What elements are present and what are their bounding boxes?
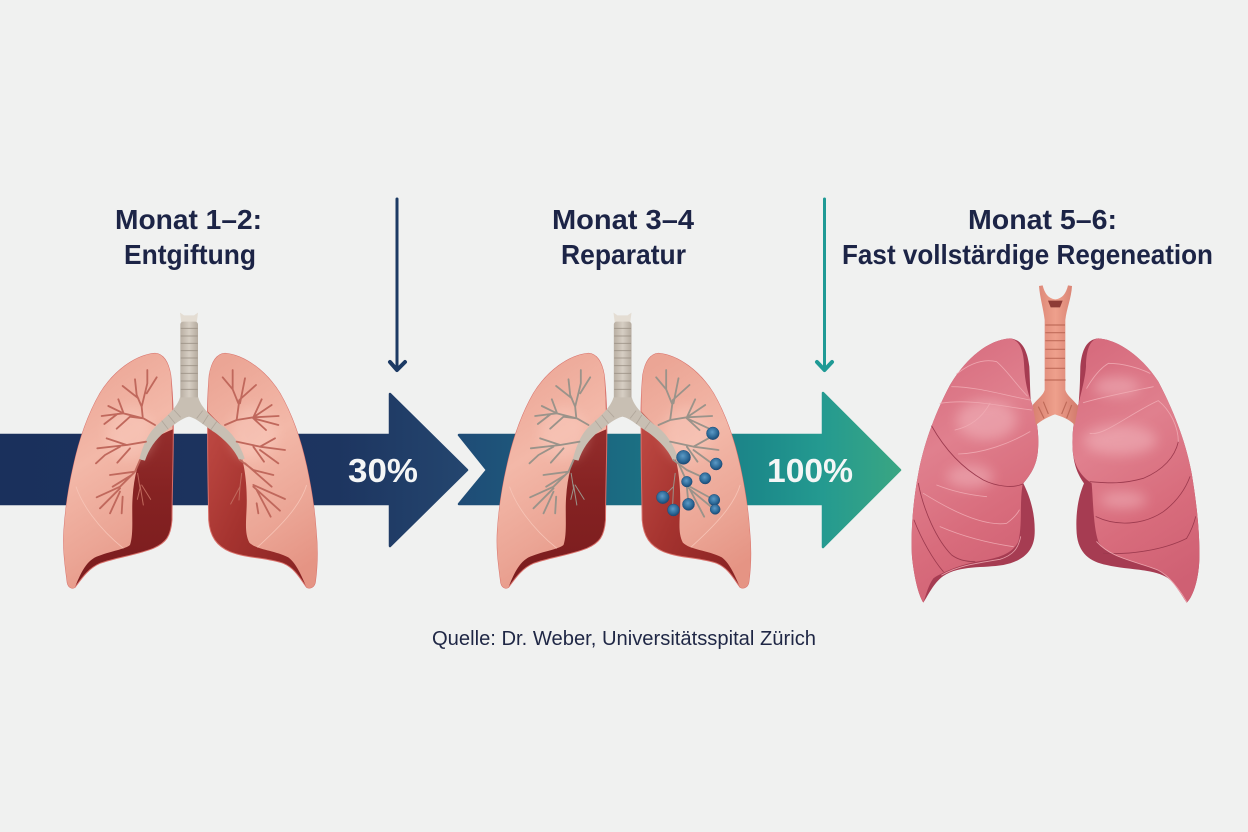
lung illustration: stage 1 bbox=[64, 313, 317, 588]
flow arrow: 100 percent stage bbox=[459, 393, 900, 547]
lung illustration: stage 2 with blue nodules bbox=[497, 313, 751, 588]
indicator arrow: navy bbox=[390, 199, 405, 370]
right lung front bbox=[1072, 338, 1199, 603]
heading: stage 3 bbox=[842, 204, 1213, 270]
heading: stage 3: Monat 5–6: bbox=[968, 204, 1117, 235]
heading: stage 1: Entgiftung bbox=[124, 239, 256, 270]
highlights bbox=[947, 377, 1157, 508]
left lung front bbox=[912, 338, 1038, 603]
trachea bbox=[1033, 285, 1078, 425]
heading: stage 1 bbox=[115, 204, 262, 270]
percentage label: 30%: 30% bbox=[348, 452, 418, 489]
heading: stage 2: Reparatur bbox=[561, 239, 686, 270]
blue nodules bbox=[656, 427, 722, 516]
lung illustration: stage 3 regenerated bbox=[912, 285, 1199, 603]
indicator arrow: teal bbox=[817, 199, 832, 370]
heading: stage 2: Monat 3–4 bbox=[552, 204, 694, 235]
left lung base bbox=[912, 338, 1038, 603]
source caption: Quelle: Dr. Weber, Universitätsspital Zürich bbox=[432, 628, 816, 650]
heading: stage 1: Monat 1–2: bbox=[115, 204, 262, 235]
percentage label: 100%: 100% bbox=[767, 452, 853, 489]
heading: stage 3: Fast vollstärdige Regeneation bbox=[842, 239, 1213, 270]
light lobe lines bbox=[923, 361, 1187, 602]
lobe fold lines bbox=[914, 426, 1196, 572]
right lung base bbox=[1072, 338, 1199, 603]
flow arrow: 30 percent stage bbox=[0, 394, 467, 546]
heading: stage 2 bbox=[552, 204, 694, 270]
